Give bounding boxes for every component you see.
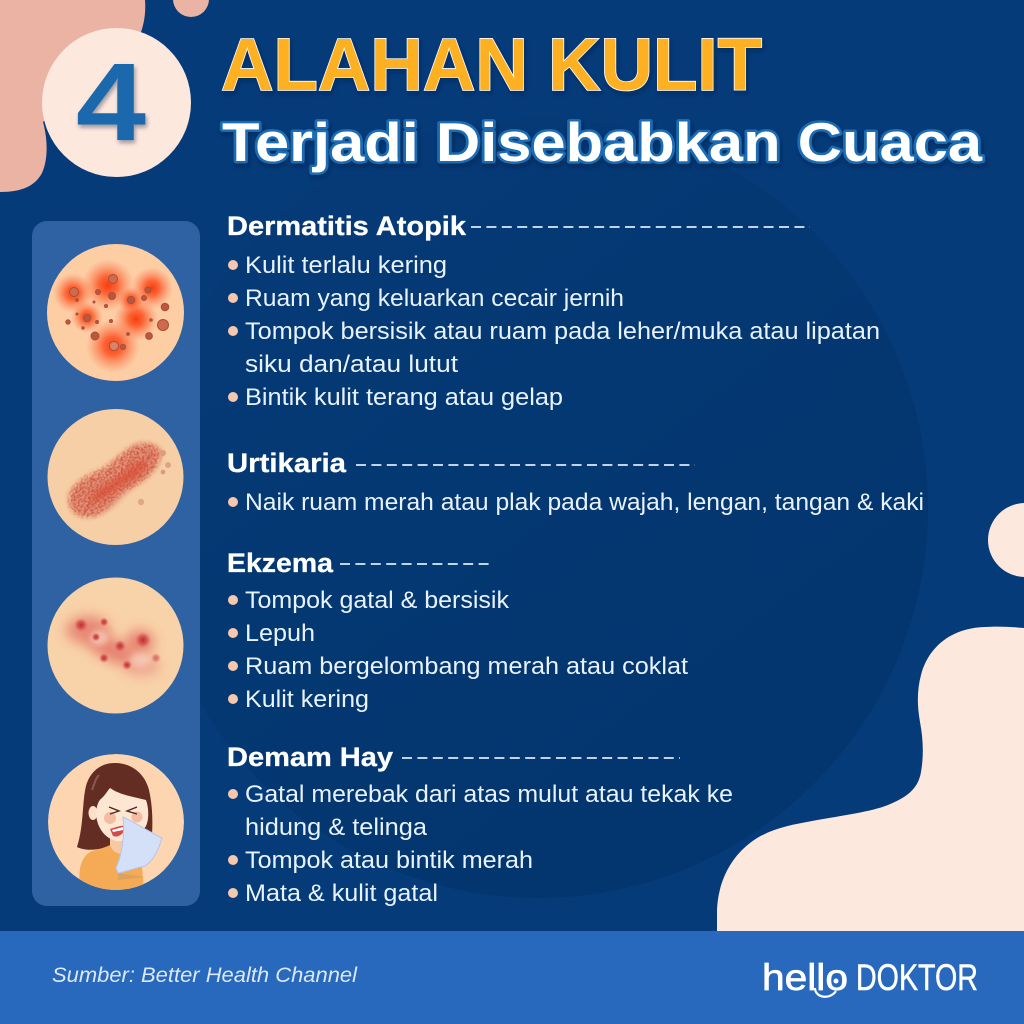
- bullet list: Ruam bergelombang merah atau coklat: [245, 653, 688, 680]
- bullet list: Mata & kulit gatal: [245, 880, 438, 907]
- bullet list: Kulit kering: [245, 686, 369, 713]
- bullet list: [228, 587, 688, 713]
- decorative blob: top left: [0, 0, 209, 192]
- heading: Urtikaria: [227, 448, 347, 478]
- icon: atopic dermatitis skin: [47, 244, 184, 381]
- bullet list: Lepuh: [245, 620, 315, 647]
- section: Urtikaria: [227, 448, 924, 516]
- icon: eczema skin: [48, 578, 184, 714]
- bullet list: siku dan/atau lutut: [245, 351, 458, 378]
- bullet list: Tompok atau bintik merah: [245, 847, 533, 874]
- bullet list: Naik ruam merah atau plak pada wajah, lengan, tangan & kaki: [245, 489, 924, 516]
- bullet list: [228, 781, 733, 907]
- number badge: 4: [76, 41, 146, 164]
- footer bar: [0, 931, 1024, 1024]
- bullet list: Ruam yang keluarkan cecair jernih: [245, 285, 624, 312]
- number badge: [42, 28, 191, 177]
- bullet list: Tompok bersisik atau ruam pada leher/muka atau lipatan: [245, 318, 880, 345]
- title: ALAHAN KULIT: [221, 23, 762, 106]
- logo: helloDOKTOR: hello: [762, 957, 848, 998]
- panel: illustrations: [32, 221, 200, 906]
- title: Terjadi Disebabkan Cuaca: [222, 111, 982, 173]
- icon: sneezing woman: [48, 754, 184, 895]
- section: Ekzema: [227, 548, 688, 713]
- heading: Demam Hay: [227, 742, 393, 772]
- source credit: Sumber: Better Health Channel: [52, 964, 358, 987]
- section: Demam Hay: [227, 742, 733, 907]
- title: [221, 23, 982, 173]
- bullet list: Tompok gatal & bersisik: [245, 587, 510, 614]
- heading: Dermatitis Atopik: [227, 211, 467, 241]
- bullet list: Bintik kulit terang atau gelap: [245, 384, 563, 411]
- section: Dermatitis Atopik: [227, 211, 880, 411]
- icon: urticaria skin: [48, 409, 184, 545]
- logo: helloDOKTOR: [762, 957, 978, 998]
- decorative shapes: right: [717, 503, 1024, 932]
- bullet list: [228, 252, 880, 411]
- bullet list: Kulit terlalu kering: [245, 252, 447, 279]
- heading: Ekzema: [227, 548, 334, 578]
- bullet list: Gatal merebak dari atas mulut atau tekak ke: [245, 781, 733, 808]
- logo: helloDOKTOR: DOKTOR: [856, 957, 978, 998]
- bullet list: hidung & telinga: [245, 814, 428, 841]
